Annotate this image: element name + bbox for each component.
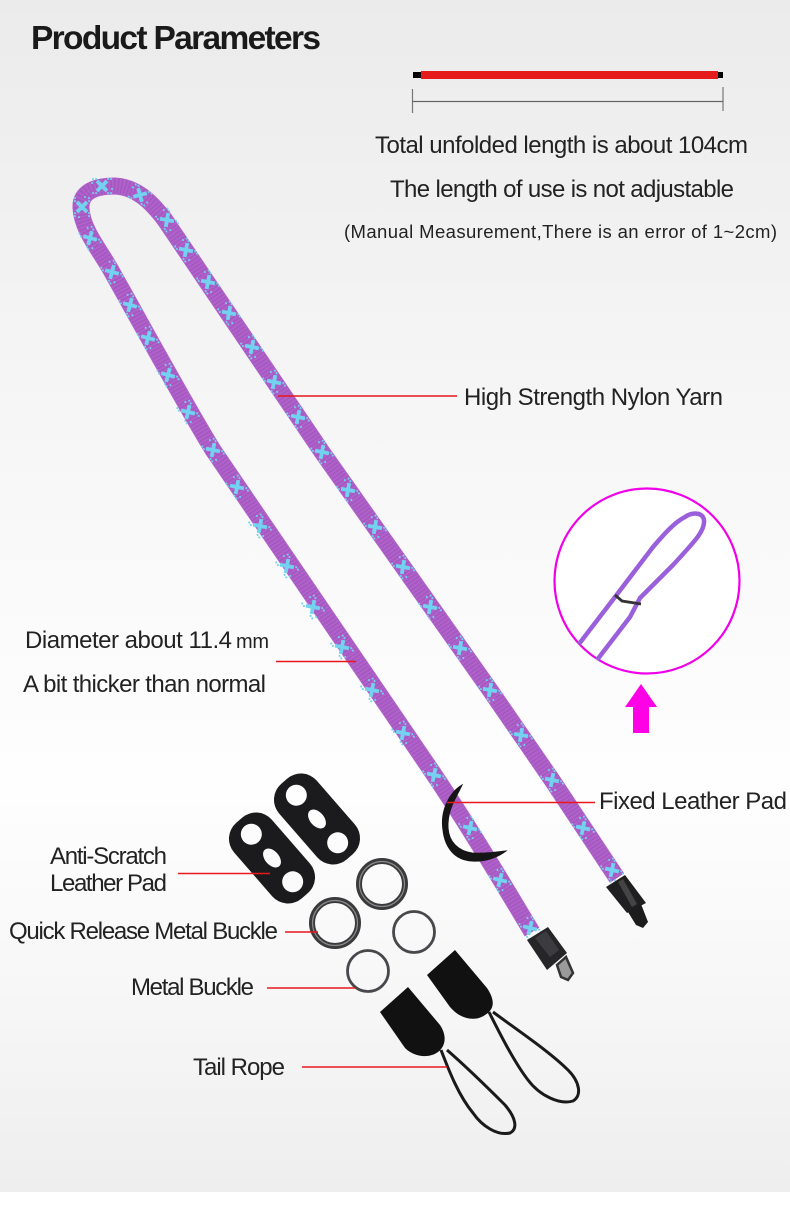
- callout: fixed leather pad: Fixed Leather Pad: [599, 788, 787, 815]
- length description text: [344, 132, 777, 242]
- quick release metal buckles: [312, 861, 405, 946]
- magenta arrow pointing up: [625, 684, 657, 733]
- metal end cap with tip: [606, 875, 648, 928]
- callout: metal buckle: Metal Buckle: [131, 974, 254, 1001]
- purple rope strap: [75, 179, 623, 940]
- callout: anti-scratch leather pad: Leather Pad: [50, 870, 167, 897]
- length description text: The length of use is not adjustable: [390, 176, 734, 203]
- metal split rings: [348, 912, 434, 992]
- anti-scratch leather pads: [220, 765, 369, 912]
- callout: diameter: Diameter about 11.4: [25, 627, 232, 654]
- fixed leather pad: [442, 785, 506, 861]
- length description text: Total unfolded length is about 104cm: [375, 132, 748, 159]
- metal end cap with loop: [527, 927, 573, 980]
- callout: diameter: [23, 627, 356, 698]
- callout: anti-scratch leather pad: Anti-Scratch: [50, 843, 167, 870]
- callout: high strength nylon yarn: High Strength Nylon Yarn: [464, 384, 723, 411]
- callout: anti-scratch leather pad: [50, 843, 270, 897]
- callout: quick release metal buckle: Quick Release Metal Buckle: [9, 918, 278, 945]
- inset circle: folded strap detail: [554, 488, 740, 674]
- title: Product Parameters: [31, 20, 321, 57]
- callout: diameter: mm: [236, 631, 269, 653]
- length diagram: unfolded strap with dimension line: [412, 71, 723, 113]
- callout: diameter: A bit thicker than normal: [23, 671, 266, 698]
- length description text: (Manual Measurement,There is an error of 1~2cm): [344, 221, 777, 242]
- tail ropes: [380, 950, 579, 1134]
- rope cyan markings: [75, 179, 623, 940]
- callout: tail rope: Tail Rope: [193, 1054, 285, 1081]
